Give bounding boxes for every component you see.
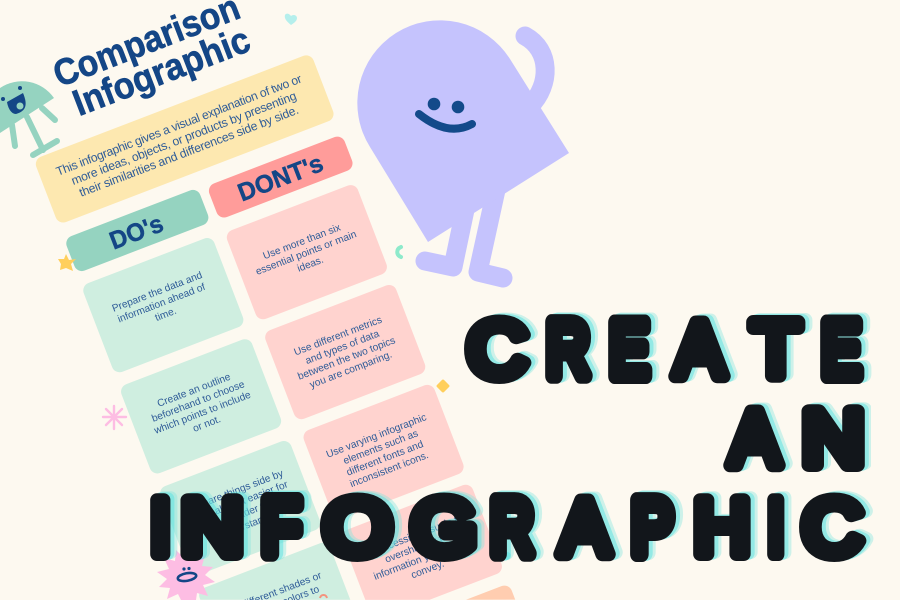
icon: coral arc xyxy=(320,595,327,598)
headline: AN: A xyxy=(730,394,779,482)
do card 1: Prepare the data and xyxy=(111,270,204,315)
dont card 1: ideas. xyxy=(296,255,325,275)
heading: DO's xyxy=(64,188,211,273)
headline: AN: N xyxy=(802,394,864,482)
do card 1: time. xyxy=(154,306,178,324)
headline: INFOGRAPHIC: R xyxy=(490,483,533,571)
do card 4 xyxy=(197,540,350,600)
dont card 2 xyxy=(263,283,428,422)
icon: heart xyxy=(285,14,297,25)
heading: DO's: DO's xyxy=(106,210,167,255)
icon: pink asterisk xyxy=(103,406,126,429)
do card 2: beforehand to choose xyxy=(150,379,247,425)
do card 2: Create an outline xyxy=(156,372,233,410)
headline: INFOGRAPHIC: P xyxy=(631,483,673,571)
dont card 4: convey. xyxy=(410,559,446,581)
do card 3: side making it easier for xyxy=(185,479,290,528)
dont card 3 xyxy=(301,383,466,521)
icon: jellyfish mascot xyxy=(0,81,57,155)
heading: DONT's xyxy=(207,134,355,220)
do card 3: Compare things side by xyxy=(181,468,286,517)
character: purple mascot xyxy=(357,20,569,278)
dont card 2: and types of data xyxy=(304,329,381,367)
peach card, cropped xyxy=(466,583,515,600)
heading: DONT's: DONT's xyxy=(234,149,327,207)
headline: INFOGRAPHIC: C xyxy=(802,483,862,571)
tail arm xyxy=(525,36,545,106)
headline: CREATE: T xyxy=(752,305,800,393)
icon: mint arc xyxy=(397,247,401,257)
face xyxy=(419,98,472,129)
headline: INFOGRAPHIC: H xyxy=(694,483,750,571)
comparison poster, tilted xyxy=(0,0,520,600)
dont card 2: Use different metrics xyxy=(293,315,384,358)
icon: pink starburst mascot xyxy=(157,548,215,600)
do card 1: information ahead of xyxy=(116,282,207,325)
dont card 3: Use varying infographic xyxy=(325,412,428,461)
do card 2: which points to include xyxy=(152,390,253,437)
do card 3 xyxy=(158,439,323,578)
headline: INFOGRAPHIC: O xyxy=(324,483,392,571)
dont card 4 xyxy=(340,482,504,600)
do card 3: understand. xyxy=(219,511,273,541)
dont card 4: Use excessive visuals that xyxy=(357,510,473,563)
headline: INFOGRAPHIC: F xyxy=(262,483,300,571)
dont card 3: different fonts and xyxy=(345,439,425,479)
do card 1 xyxy=(81,236,246,375)
title: Infographic xyxy=(67,19,256,124)
headline: CREATE: E xyxy=(821,305,861,393)
dont card 2: you are comparing. xyxy=(308,349,394,391)
intro panel: their similarities and differences side by side. xyxy=(77,103,301,200)
do card 2 xyxy=(119,337,283,476)
intro panel: more ideas, objects, or products by presenting xyxy=(69,89,298,188)
headline: CREATE: C xyxy=(467,305,527,393)
intro panel: This infographic gives a visual explanation of two or xyxy=(54,72,304,179)
headline: INFOGRAPHIC: I xyxy=(767,483,785,571)
dont card 1 xyxy=(225,183,389,322)
dont card 2: between the two topics xyxy=(296,335,397,383)
dont card 3: inconsistent icons. xyxy=(349,450,430,490)
dont card 3: elements such as xyxy=(342,428,420,467)
dont card 4: information you want to xyxy=(372,535,475,583)
headline: CREATE: A xyxy=(675,305,724,393)
do card 3: the reader to xyxy=(213,499,271,530)
body xyxy=(357,20,569,242)
icon: yellow diamond xyxy=(436,379,450,393)
icon: cyan dot xyxy=(503,552,511,560)
headline: INFOGRAPHIC: G xyxy=(411,483,476,571)
intro panel xyxy=(34,53,336,225)
do card 2: or not. xyxy=(192,414,222,435)
dont card 4: overshadow the xyxy=(384,529,455,566)
headline: INFOGRAPHIC: A xyxy=(560,483,609,571)
headline: INFOGRAPHIC: N xyxy=(181,483,243,571)
icon: yellow star xyxy=(58,254,76,271)
headline: CREATE: R xyxy=(546,305,589,393)
legs xyxy=(425,190,503,278)
dont card 1: Use more than six xyxy=(262,222,342,262)
headline: CREATE: E xyxy=(609,305,649,393)
headline: INFOGRAPHIC: I xyxy=(150,483,171,571)
dont card 1: essential points or main xyxy=(254,229,358,278)
